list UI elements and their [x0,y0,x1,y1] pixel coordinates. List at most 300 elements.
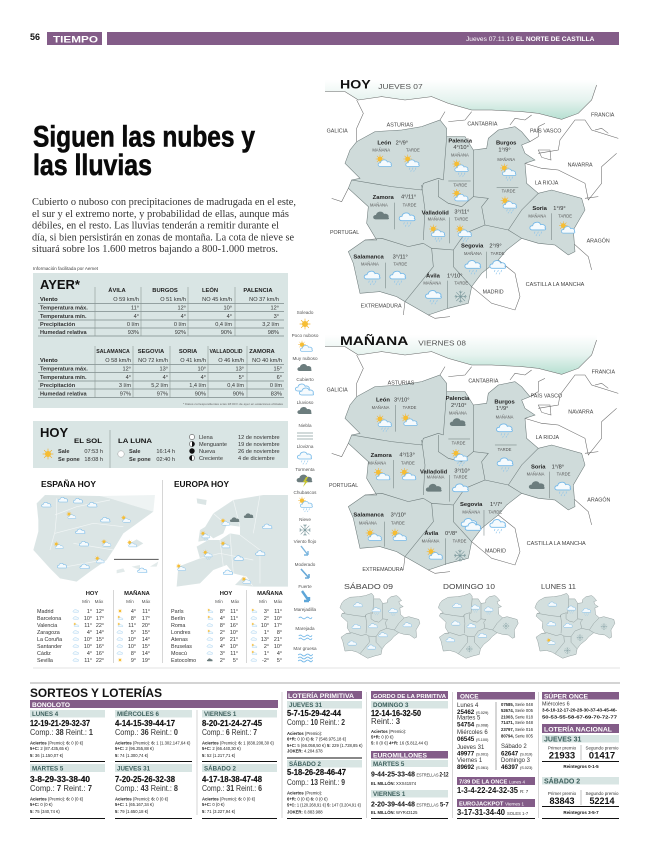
domingo 3 [371,701,448,746]
la luna: Sale [129,449,141,455]
table: europe cities: Roma [171,623,185,629]
province: Valladolid: TARDE [454,217,468,222]
domingo 3: 5+R: 0 (0 €) [371,734,394,740]
intro text block: día, si bien persistirán en zonas de montaña. La cota de nieve se [32,232,294,244]
forecast: sábado 09 [340,582,420,658]
gordo bar: GORDO DE LA PRIMITIVA [373,694,447,700]
sábado 2: Comp.: 13 Reint.: 9 [287,778,346,787]
legend: weather symbols: Llovizna [297,444,314,449]
province: Salamanca [353,254,408,285]
legend: weather symbols: Marejadilla [294,607,317,612]
province: León: León [377,141,392,147]
once results right: 80794, Serie 005 [501,734,534,738]
province: Burgos: 1°/9° [498,148,511,154]
eurojackpot [457,799,535,818]
bonoloto sábado 2: Aciertos (Premio): 6: 0 (0 €) [202,796,256,802]
legend: weather symbols: Lluvioso [297,400,314,405]
moon phases: Nueva [199,449,216,455]
province: Segovia: MAÑANA [462,509,480,514]
table: spain cities: HOY [86,591,98,597]
section: lotería primitiva [287,691,363,818]
province: Palencia: MAÑANA [449,410,467,415]
heading: hoy [340,78,423,92]
table: second stations: 13° [160,366,168,372]
viernes 1: VIERNES 1 [373,791,406,798]
table: second stations: 3 l/m [119,383,131,389]
bonoloto miércoles 6: 5: 74 (1.300,74 €) [115,753,149,758]
once results left: Jueves 31 [457,745,485,751]
bonoloto miércoles 6: 5+C: 2 (96.255,88 €) [115,746,154,751]
province: Zamora: TARDE [401,460,415,465]
table: second stations: VALLADOLID [209,349,243,355]
province: Burgos: TARDE [502,188,516,193]
table: first stations: 4° [227,314,232,320]
once results right [501,702,534,771]
domingo 3: 12-14-16-32-50 [371,708,421,718]
table: first stations: BURGOS [152,288,178,294]
province: Ávila [422,530,467,562]
viernes 1: EL MILLÓN: WYR43125 [371,810,418,815]
province: Soria: MAÑANA [528,213,546,218]
province: Burgos: Burgos [494,399,515,405]
bonoloto viernes 1: VIERNES 1 [204,711,237,718]
table: first stations: 4° [134,314,139,320]
table: spain cities: Zaragoza [37,630,60,636]
domingo 3: 5: 0 (0 €) 4+R: 16 (5.812,44 €) [371,740,429,746]
province: Segovia: TARDE [491,251,505,256]
table: first stations: 12° [271,306,279,312]
once results left: 54754 (S.008) [457,722,489,728]
intro text block: situará sobre los 1.600 metros bajando a 800-1.000 metros. [32,243,278,255]
province: Palencia [446,396,470,466]
table: europe cities: 16° [230,623,238,629]
domingo 3: DOMINGO 3 [373,702,409,709]
table: europe cities: 11° [230,609,238,615]
once results left: Miércoles 6 [457,730,488,736]
province: Palencia: 4°/10° [453,145,469,151]
region labels: CANTABRIA [467,122,498,128]
table: first stations: 98% [268,330,279,336]
section: súper once [542,692,619,720]
province: Zamora: 4°/11° [401,195,416,201]
legend: weather symbols: Tormenta [295,467,315,472]
table: spain cities: La Coruña [37,637,62,643]
province: Zamora: MAÑANA [370,202,388,207]
table: first stations: 0 l/m [174,322,186,328]
table: europe cities: 2° [220,630,225,636]
province: Ávila: TARDE [454,280,468,285]
province: Soria: 1°/8° [552,464,564,470]
jueves 31: 5+C: 5 (66.058,50 €) 5: 229 (1.728,85 €) [287,743,363,748]
once results right: Sábado 2 [501,744,527,750]
province: Palencia: TARDE [453,183,467,188]
table: second stations: NO 40 km/h [252,358,282,364]
martes 5: MARTES 5 [373,761,405,768]
legend: weather symbols: Moderado [295,562,316,567]
bonoloto miércoles 6: Comp.: 36 Reint.: 0 [115,728,179,737]
table: europe cities: 10° [274,616,282,622]
table: europe cities: 8° [220,609,225,615]
sábado 2: 5-18-26-28-46-47 [287,767,346,777]
once results left: Martes 5 [457,716,481,722]
region labels [327,113,615,309]
province: Palencia: MAÑANA [451,153,469,158]
province: Burgos: MAÑANA [497,157,515,162]
bonoloto viernes 1: 5: 52 (1.217,71 €) [202,753,236,758]
headline: las lluvias [33,149,152,182]
table: second stations: SEGOVIA [138,349,165,355]
header bar: Jueves 07.11.19 EL NORTE DE CASTILLA [466,36,595,43]
table: second stations: 97% [120,392,131,398]
table: first stations: 92% [175,330,186,336]
table: second stations: 12° [123,366,131,372]
bonoloto viernes 1: Aciertos (Premio): 6: 1 (838.208,30 €) [202,740,275,746]
forecast: domingo 10: DOMINGO 10 [443,582,495,591]
province: Zamora: MAÑANA [368,460,386,465]
table: second stations: NO 72 km/h [138,358,168,364]
table: first stations: Temperatura mín. [40,314,87,320]
bonoloto sábado 2: Comp.: 31 Reint.: 6 [202,784,263,793]
table: second stations: SALAMANCA [96,349,130,355]
la luna: LA LUNA [118,438,152,445]
province: Palencia: Palencia [446,396,470,402]
el sol: Se pone [58,457,80,463]
province: Valladolid: Valladolid [420,469,448,475]
region labels: PAÍS VASCO [530,127,561,134]
once results right: 46397 (S.023) [501,764,533,771]
jueves 31: JOKER: 4.204.678 [287,748,323,754]
province: Salamanca: Salamanca [353,255,385,261]
table: spain cities: 4° [87,651,92,657]
province: Burgos: TARDE [498,447,512,452]
bonoloto sábado 2: 5: 71 (3.227,94 €) [202,809,236,814]
page number: 56 [30,32,40,42]
intro text block: Cubierto o nuboso con precipitaciones de madrugada en el este, [32,196,296,208]
viernes 1: ESTRELLAS [416,802,439,808]
table: europe cities: 4° [220,616,225,622]
province: Segovia: 2°/9° [489,244,502,250]
bonoloto sábado 2: 5+C: 0 (0 €) [202,802,225,807]
table: second stations: 5° [239,375,244,381]
bonoloto jueves 31: 7-20-25-26-32-38 [115,774,175,784]
province: León: 3°/10° [394,398,410,404]
sábado 2: 6+R: 0 (0 €) 6: 0 (0 €) [287,796,328,802]
bonoloto martes 5: Comp.: 7 Reint.: 7 [30,784,92,793]
table: spain cities: MAÑANA [124,590,151,597]
province: León: 2°/9° [396,141,408,147]
table: second stations: O 46 km/h [218,358,244,364]
table: europe cities: 5° [233,658,238,664]
province: Palencia: 2°/10° [451,403,467,409]
table: spain cities: 10° [128,637,136,643]
table: spain cities: 10° [84,644,92,650]
province: Ávila [423,272,468,304]
once results right: Domingo 3 [501,758,531,764]
province: Zamora [368,453,416,480]
bonoloto viernes 1 [202,710,277,762]
province: León: MAÑANA [372,405,390,410]
table: second stations: SORIA [179,349,198,355]
once results left: 25462 (S.029) [457,709,489,716]
table: spain cities: 11° [84,623,92,629]
table: second stations: Precipitación [40,383,76,389]
table: second stations: 90% [233,392,244,398]
table: first stations: NO 37 km/h [249,297,279,303]
region labels: NAVARRA [568,410,594,416]
table: europe cities: 10° [230,630,238,636]
table: europe cities: 1° [264,651,269,657]
table: second stations: 4° [126,375,131,381]
table: second stations: O 41 km/h [180,358,206,364]
province: Ávila: TARDE [453,538,467,543]
viernes 1: 5-7 [440,802,449,808]
jueves 31: JUEVES 31 [289,702,323,709]
table: europe cities: Máx [274,599,283,604]
bonoloto lunes 4: Comp.: 38 Reint.: 1 [30,728,94,737]
heading: hoy: JUEVES 07 [378,84,423,91]
panel: ayer [33,273,288,408]
sábado 2 [542,776,619,818]
table: spain cities: 8° [131,651,136,657]
table: europe cities: Berlín [171,616,185,622]
legend: weather symbols: Fuerte [298,584,312,589]
table: spain cities: 17° [142,616,150,622]
region labels: PAÍS VASCO [531,392,562,399]
table: spain cities: 1° [87,609,92,615]
map: europe [176,495,288,587]
el sol: EL SOL [74,438,102,445]
table: spain cities: 10° [128,644,136,650]
table: spain cities: Sevilla [37,658,53,664]
table: europe cities: 11° [230,651,238,657]
table: spain cities: 20° [142,623,150,629]
legend: weather symbols [292,310,319,662]
table: second stations: Humedad relativa [40,392,88,398]
moon phases: Creciente [199,456,223,462]
table: first stations: 90% [221,330,232,336]
table: second stations: 97% [157,392,168,398]
table: first stations: LEÓN [202,286,218,294]
table: spain cities: 11° [128,623,136,629]
el sol: 07:53 h [84,449,103,455]
heading: hoy: HOY [40,425,68,440]
province: Ávila: Ávila [424,530,439,537]
map: spain [33,495,159,582]
table: spain cities: 10° [84,637,92,643]
table: spain cities: 4° [87,630,92,636]
table: first stations: Humedad relativa [40,330,88,336]
sábado 2: SÁBADO 2 [289,761,322,768]
section: gordo y euromillones [371,691,449,818]
headline: Siguen las nubes y [33,120,255,154]
region labels: EXTREMADURA [361,303,402,309]
table: europe cities: 8° [220,623,225,629]
7/39: 1-3-4-22-24-32-35 [457,785,518,795]
jueves 31: 01417 [589,750,615,762]
table: europe cities: Atenas [171,637,188,643]
bonoloto lunes 4: 5+C: 2 (87.435,65 €) [30,746,69,751]
map: mañana viernes 08 [325,325,618,573]
bonoloto jueves 31: JUEVES 31 [117,766,151,772]
region labels: PORTUGAL [330,230,359,236]
region labels: ARAGÓN [587,496,611,503]
once results left: 89692 (S.061) [457,764,489,771]
province: Salamanca: TARDE [391,520,405,525]
province: León: TARDE [406,148,420,153]
bonoloto bar [30,700,278,709]
heading: hoy: HOY [340,78,371,92]
bonoloto bar: BONOLOTO [32,702,70,709]
legend: weather symbols: Poco nuboso [292,333,319,338]
table: second stations: 90% [195,392,206,398]
table: first stations: O 51 km/h [160,297,186,303]
table: second stations: ZAMORA [249,349,276,355]
bar: LOTERÍA PRIMITIVA [288,691,354,700]
jueves 31: Segundo premio [585,746,619,750]
sábado 2: Primer premio [548,791,577,796]
jueves 31: Reintegros 0-1-5 [563,764,599,769]
legend: weather symbols: Mar gruesa [293,646,317,651]
bonoloto miércoles 6: MIÉRCOLES 6 [117,710,160,718]
province: Burgos: Burgos [496,141,516,147]
bonoloto martes 5: MARTES 5 [32,766,64,772]
region labels: GALICIA [327,129,348,135]
province: Segovia: MAÑANA [464,251,482,256]
bonoloto jueves 31: 5: 79 (1.650,18 €) [115,809,149,814]
eurojackpot: 3-17-31-34-40 [457,807,505,817]
table: europe cities: 9° [220,637,225,643]
table: first stations: Precipitación [40,322,76,328]
province: Segovia: Segovia [460,502,483,508]
bonoloto miércoles 6: Aciertos (Premio): 6: 1 (1.302.147,64 €) [115,740,191,746]
table: first stations: PALENCIA [243,288,273,294]
viernes 1: 2-20-39-44-48 [371,802,415,808]
table: spain cities: 4° [131,609,136,615]
bonoloto lunes 4: LUNES 4 [32,711,59,718]
table: second stations: 83% [271,392,282,398]
province: Zamora: 4°/13° [399,453,415,459]
region labels: NAVARRA [568,163,593,169]
bonoloto sábado 2 [202,764,277,818]
province: León: León [376,398,390,404]
results: 3-6-10-12-17-20-28-30-37-43-45-46- [542,708,617,714]
jueves 31: 5-7-15-29-42-44 [287,708,341,718]
headline [33,120,255,182]
region labels: GALICIA [327,387,348,393]
bonoloto jueves 31: 5+C: 1 (65.167,34 €) [115,802,154,807]
martes 5: 2-12 [440,772,449,778]
eurojackpot: SOLES 1-7 [507,811,529,816]
table: spain cities: 17° [96,616,104,622]
7/39: R: 7 [520,789,529,794]
once results right: 23797, Serie 016 [501,727,534,732]
el sol [43,438,103,463]
province: Zamora: TARDE [403,202,417,207]
bonoloto martes 5: 3-8-29-33-38-40 [30,774,90,784]
el sol: 18:08 h [84,457,103,463]
table: second stations: Temperatura máx. [40,366,88,372]
region labels: CANTABRIA [468,379,499,385]
moon phases: 4 de diciembre [238,456,275,462]
heading: ESPAÑA HOY [41,479,96,489]
jueves 31: Primer premio [548,746,577,750]
table: second stations: Temperatura mín. [40,375,87,381]
province: Palencia: Palencia [448,138,473,144]
province: Valladolid: 3°/11° [454,210,469,216]
table: spain cities: 16° [96,651,104,657]
province: Salamanca: 3°/11° [393,254,408,260]
table: spain cities: 11° [142,609,150,615]
table: spain cities: 8° [131,616,136,622]
map: hoy jueves 07 [325,70,618,318]
province: Zamora: Zamora [371,453,392,459]
page header [30,32,619,46]
province: Ávila: MAÑANA [423,280,441,285]
intro text block: el sur y el extremo norte, y probabilidad de ellas, aunque más [32,208,289,220]
region labels: PORTUGAL [329,483,358,489]
province: Palencia: TARDE [452,440,466,445]
table: spain cities: 15° [142,644,150,650]
bonoloto sábado 2: SÁBADO 2 [204,766,237,772]
province: Segovia: Segovia [461,244,484,250]
table: europe cities: Mín [215,599,223,604]
martes 5: 9-44-25-33-48 [371,772,415,778]
table: second stations: 4° [163,375,168,381]
region labels: LA RIOJA [536,435,559,441]
table: spain cities: 14° [142,651,150,657]
table: spain cities: 15° [142,630,150,636]
province: Ávila: MAÑANA [422,538,440,543]
table: spain cities: 16° [96,644,104,650]
legend: weather symbols: Soleado [297,310,314,315]
province: Salamanca: MAÑANA [361,262,379,267]
once bar: ONCE [460,694,479,700]
province: Valladolid: 3°/10° [454,469,470,475]
intro text block: débiles, en el resto. Las lluvias tenderán a remitir durante el [32,220,279,232]
sábado 2: 52214 [589,796,615,806]
forecast: lunes 11: LUNES 11 [541,582,576,591]
province: Valladolid: Valladolid [422,210,449,216]
panel: europa hoy [171,479,288,664]
heading: mañana [340,333,466,348]
table: spain cities: 5° [131,630,136,636]
section: lotería nacional [542,724,619,818]
table: first stations [40,286,279,336]
region labels: EXTREMADURA [362,567,404,573]
7/39 [457,777,535,795]
table: spain cities: Santander [37,644,62,650]
once results right: 71471, Serie 048 [501,720,534,725]
bonoloto martes 5 [30,764,105,818]
bonoloto miércoles 6 [115,710,192,762]
table: first stations: 0,4 l/m [215,322,232,328]
sábado 2: Reintegros 3-5-7 [563,810,599,815]
euromillones bar: EUROMILLONES [373,752,428,760]
table: first stations: 12° [178,306,186,312]
table: second stations: O 58 km/h [105,358,131,364]
results [542,702,617,720]
moon phases: 12 de noviembre [238,435,280,441]
table: spain cities: Mín [126,599,134,604]
region labels: CASTILLA LA MANCHA [527,541,586,547]
table: spain cities: Cádiz [37,651,51,657]
bonoloto martes 5: 5: 75 (340,74 €) [30,809,60,814]
legend: weather symbols: Cubierto [296,377,314,382]
table: spain cities: 15° [96,637,104,643]
moon phases: Menguante [199,442,227,448]
table: europe cities: HOY [220,591,232,597]
table: europe cities: 21° [274,637,282,643]
